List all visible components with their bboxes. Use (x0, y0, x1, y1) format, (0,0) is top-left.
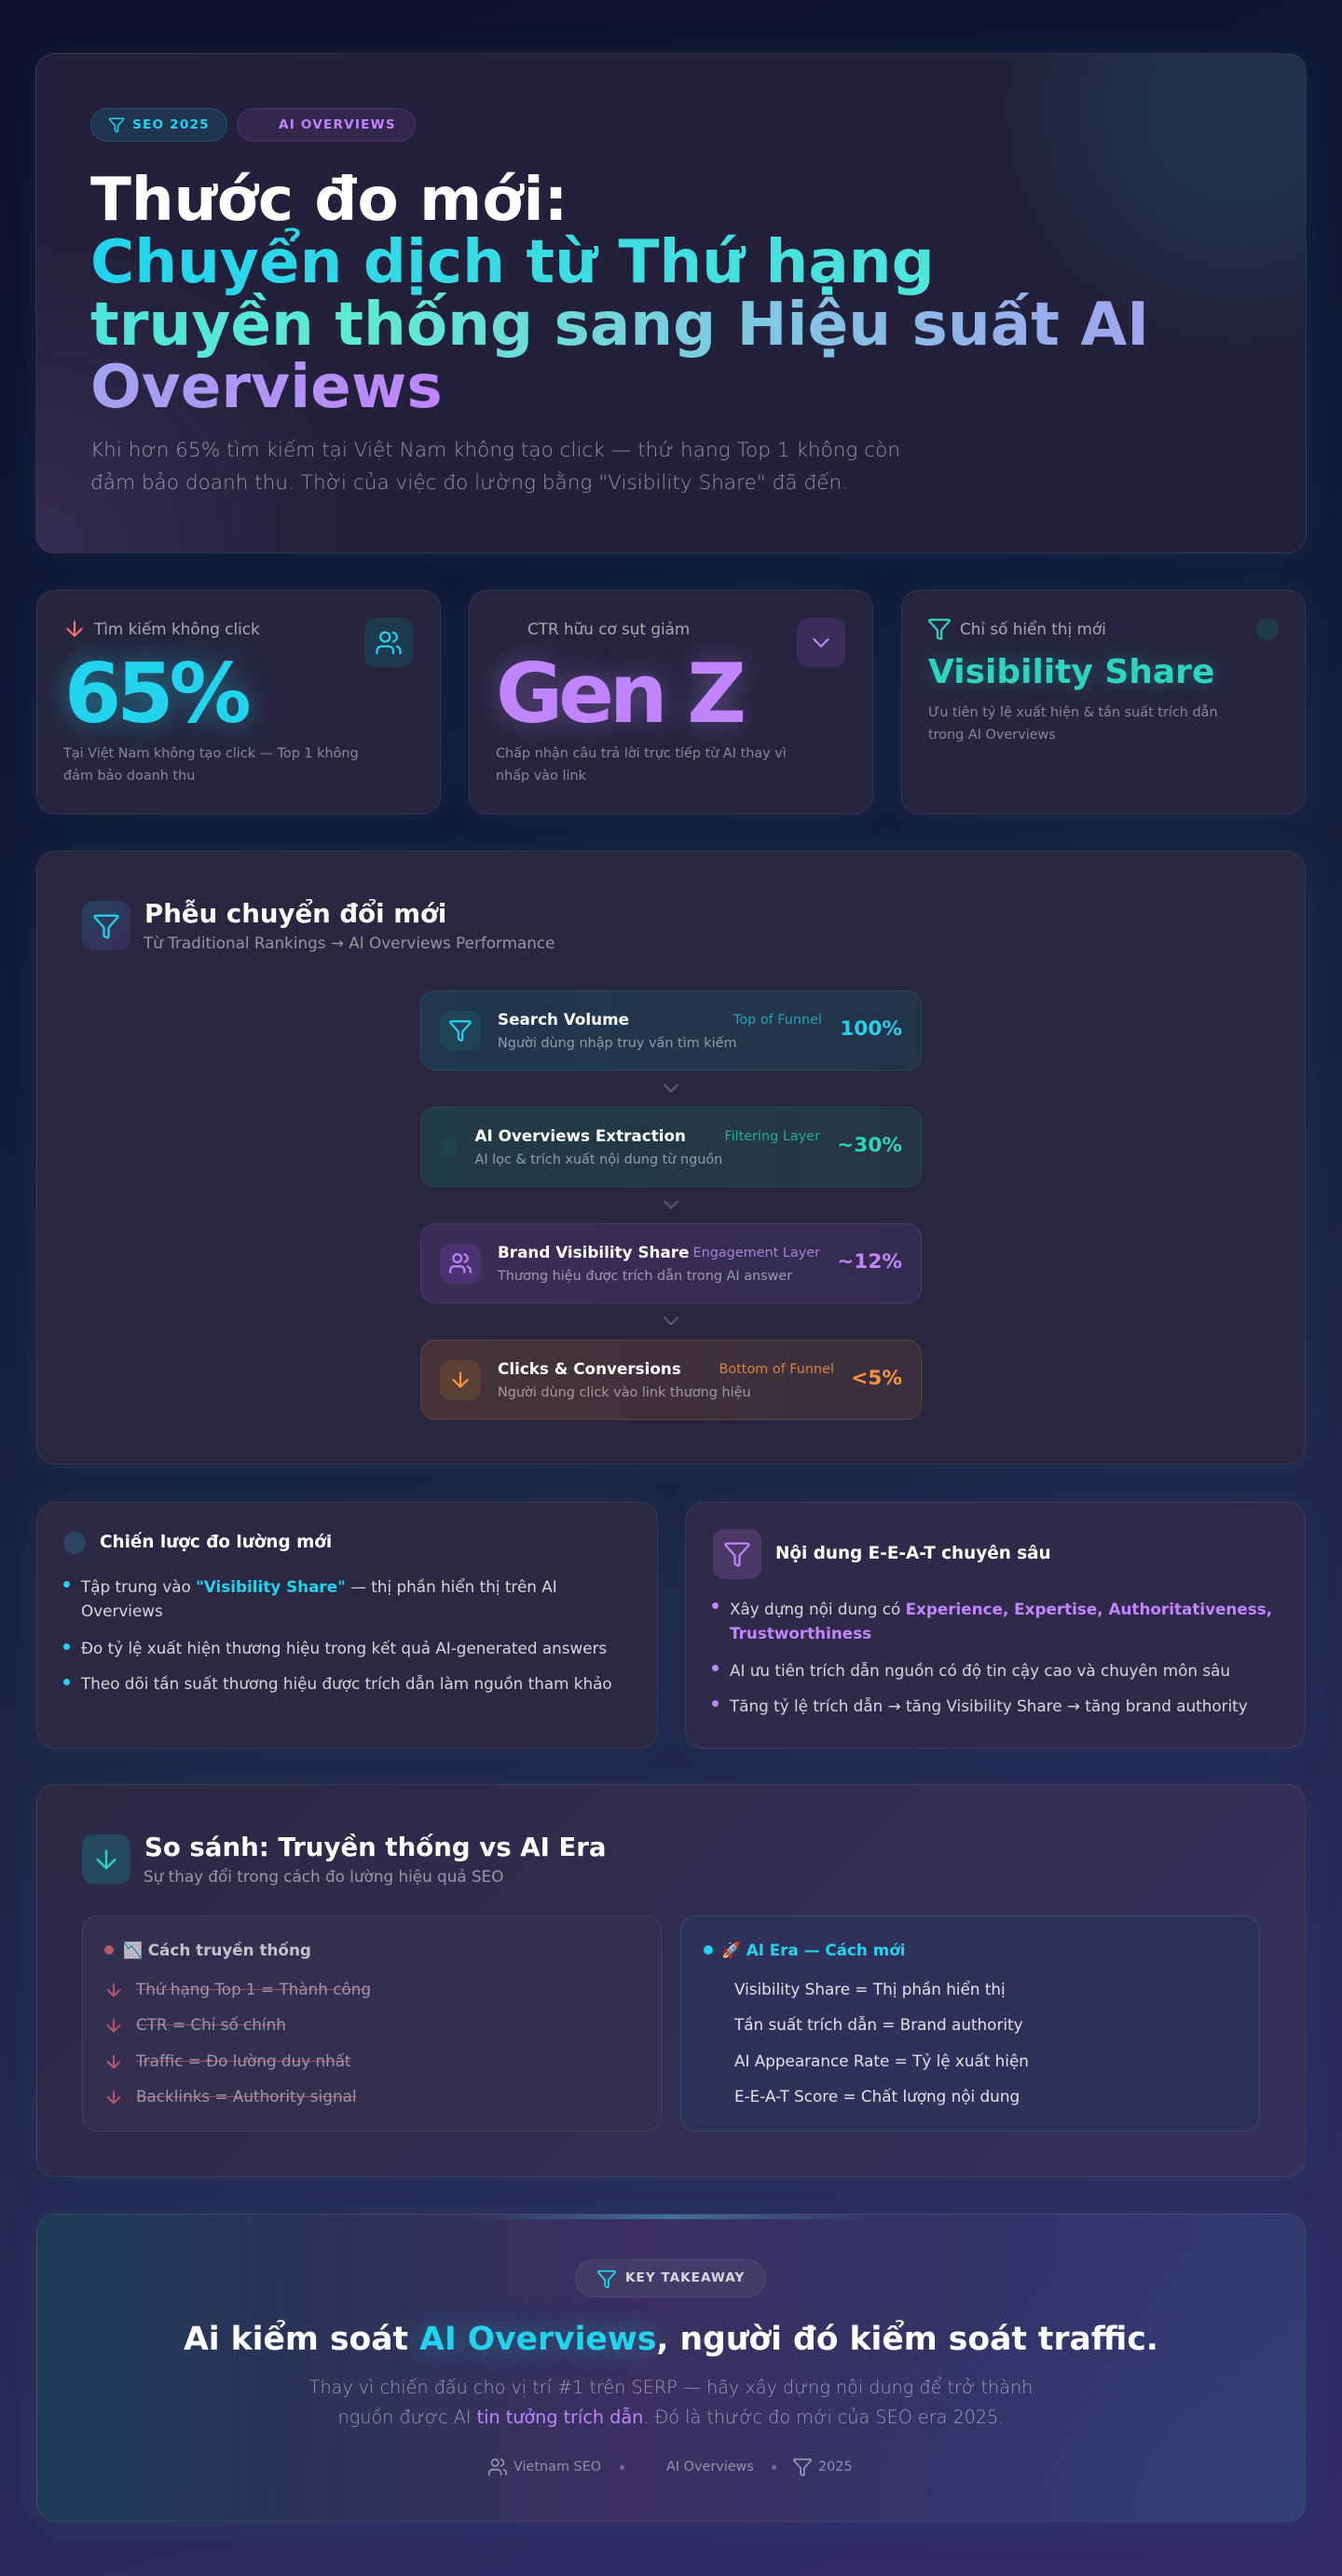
title: truyền thống sang Hiệu suất AI (90, 290, 1149, 360)
bullet text: Tăng tỷ lệ trích dẫn → tăng Visibility Share → tăng brand authority (730, 1697, 1248, 1715)
bullet (712, 1665, 719, 1671)
chevron (664, 1084, 678, 1092)
bullet (63, 1643, 70, 1650)
bullet (712, 1602, 719, 1609)
bullet text: Đo tỷ lệ xuất hiện thương hiệu trong kết quả AI-generated answers (81, 1639, 607, 1657)
funnel step 4: Bottom of Funnel (719, 1362, 834, 1377)
icon box: arrow (82, 1834, 130, 1884)
funnel step 3: Thương hiệu được trích dẫn trong AI answer (498, 1269, 792, 1284)
panel: comparison (36, 1784, 1306, 2177)
value: 65%: 65% (64, 646, 247, 742)
panel: stat card CTR (469, 590, 873, 814)
panel: hero (35, 53, 1307, 553)
description: Tại Việt Nam không tạo click — Top 1 không (63, 746, 359, 761)
bullet text: Theo dõi tần suất thương hiệu được trích dẫn làm nguồn tham khảo (81, 1674, 612, 1693)
label: CTR hữu cơ sụt giảm (527, 619, 690, 637)
funnel step 1: 100% (840, 1017, 902, 1041)
funnel step 3: ~12% (837, 1250, 902, 1274)
tag: SEO 2025 (90, 108, 227, 142)
funnel step 2: Filtering Layer (724, 1129, 820, 1144)
list: AI era (734, 1980, 1029, 2106)
icon placeholder (1256, 618, 1279, 640)
label: Chỉ số hiển thị mới (960, 619, 1106, 637)
funnel step 2: ~30% (837, 1134, 902, 1157)
list: traditional: CTR = Chỉ số chính (136, 2015, 286, 2034)
heading: Phễu chuyển đổi mới (144, 898, 446, 929)
panel: stat card zero-click (36, 590, 441, 814)
panel: AI era (680, 1915, 1260, 2132)
bullet text (730, 1600, 1272, 1642)
bullet text: Tập trung vào "Visibility Share" — thị phần hiển thị trên AI (81, 1577, 557, 1596)
icon box: users (364, 618, 413, 667)
heading: Chiến lược đo lường mới (100, 1533, 332, 1552)
subtitle: đảm bảo doanh thu. Thời của việc đo lường bằng "Visibility Share" đã đến. (90, 471, 848, 495)
header traditional: 📉 Cách truyền thống (123, 1940, 311, 1958)
body: nguồn được AI tin tưởng trích dẫn. Đó là thước đo mới của SEO era 2025. (338, 2406, 1004, 2428)
label: Tìm kiếm không click (94, 619, 260, 637)
heading: So sánh: Truyền thống vs AI Era (144, 1832, 607, 1862)
list: AI era: AI Appearance Rate = Tỷ lệ xuất hiện (734, 2051, 1029, 2070)
list: traditional: Backlinks = Authority signal (136, 2087, 357, 2106)
subheading: Sự thay đổi trong cách đo lường hiệu quả SEO (144, 1867, 503, 1886)
icon box: chevron (797, 618, 845, 667)
bullet text (80, 1577, 557, 1620)
chevron (664, 1317, 678, 1325)
description (496, 745, 787, 784)
bullet text: AI ưu tiên trích dẫn nguồn có độ tin cậy cao và chuyên môn sâu (730, 1661, 1230, 1680)
list: AI era: Visibility Share = Thị phần hiển thị (734, 1980, 1006, 1998)
headline: Ai kiểm soát AI Overviews, người đó kiểm soát traffic. (184, 2321, 1158, 2358)
description (928, 704, 1218, 743)
description: Ưu tiên tỷ lệ xuất hiện & tần suất trích dẫn (928, 705, 1218, 720)
list: AI era: E-E-A-T Score = Chất lượng nội dung (734, 2087, 1020, 2106)
icon placeholder (63, 1532, 86, 1554)
funnel step 3: Brand Visibility Share (498, 1243, 689, 1261)
value: Gen Z: Gen Z (496, 646, 742, 742)
tag: SEO 2025: SEO 2025 (132, 117, 210, 132)
description (63, 746, 359, 784)
chevron (664, 1200, 678, 1209)
panel: stat card visibility (901, 590, 1306, 814)
icon: funnel (928, 619, 951, 640)
funnel step 1: Người dùng nhập truy vấn tìm kiếm (498, 1036, 736, 1051)
funnel step 4: <5% (851, 1367, 902, 1390)
funnel step 2: AI lọc & trích xuất nội dung từ nguồn (475, 1152, 722, 1167)
title (90, 164, 1149, 422)
funnel step 1: Search Volume (498, 1010, 629, 1029)
panel: key takeaway (36, 2214, 1306, 2522)
description: nhấp vào link (496, 769, 586, 784)
list: traditional: Thứ hạng Top 1 = Thành công (136, 1980, 371, 1998)
funnel step 1: Top of Funnel (733, 1013, 822, 1028)
meta row: AI Overviews (666, 2460, 754, 2474)
icon box: funnel (713, 1529, 761, 1579)
pill: key takeaway (575, 2259, 766, 2297)
funnel step 3: Engagement Layer (693, 1246, 820, 1261)
funnel step 3 (420, 1223, 922, 1303)
description: đảm bảo doanh thu (63, 769, 195, 784)
description: Chấp nhận câu trả lời trực tiếp từ AI thay vì (496, 746, 787, 761)
list: traditional (106, 1980, 371, 2106)
title: Overviews (90, 352, 443, 422)
icon box: funnel (82, 901, 130, 950)
dot (104, 1945, 114, 1955)
funnel step 1 (420, 990, 922, 1070)
bullets (63, 1581, 70, 1588)
subtitle (90, 439, 900, 495)
bullet (712, 1700, 719, 1707)
icon: arrow down red (66, 620, 83, 637)
tag: AI Overviews (237, 108, 416, 142)
funnel step 4: Người dùng click vào link thương hiệu (498, 1385, 751, 1400)
meta row (488, 2458, 853, 2476)
list: AI era: Tần suất trích dẫn = Brand authority (734, 2015, 1023, 2034)
funnel step 4 (420, 1340, 922, 1420)
body: Thay vì chiến đấu cho vị trí #1 trên SERP — hãy xây dựng nội dung để trở thành (309, 2376, 1033, 2398)
heading: Nội dung E-E-A-T chuyên sâu (775, 1544, 1051, 1563)
tag: AI Overviews: AI OVERVIEWS (279, 117, 396, 132)
title: Thước đo mới: (90, 164, 568, 235)
list: traditional: Traffic = Đo lường duy nhất (136, 2051, 351, 2070)
subheading: Từ Traditional Rankings → AI Overviews Performance (144, 934, 555, 952)
bullet text: Xây dựng nội dung có Experience, Expertise, Authoritativeness, (730, 1600, 1272, 1618)
panel: traditional (82, 1915, 662, 2132)
bullet (63, 1679, 70, 1685)
header AI era: 🚀 AI Era — Cách mới (721, 1940, 905, 1958)
panel: strategy (36, 1502, 658, 1749)
bullet text: Overviews (81, 1601, 163, 1620)
dot (704, 1945, 713, 1955)
pill: key takeaway: KEY TAKEAWAY (625, 2270, 745, 2285)
bullet text: Trustworthiness (730, 1624, 871, 1642)
panel: funnel (36, 851, 1306, 1465)
funnel step 2: AI Overviews Extraction (475, 1126, 686, 1145)
meta row: Vietnam SEO (514, 2460, 601, 2474)
description: trong AI Overviews (928, 728, 1056, 743)
value: Visibility Share: Visibility Share (928, 653, 1214, 691)
subtitle: Khi hơn 65% tìm kiếm tại Việt Nam không tạo click — thứ hạng Top 1 không còn (90, 439, 900, 462)
funnel step 4: Clicks & Conversions (498, 1359, 681, 1378)
panel: E-E-A-T (684, 1502, 1306, 1749)
funnel step 2 (420, 1107, 922, 1187)
body (309, 2376, 1033, 2428)
meta row: 2025 (818, 2460, 853, 2474)
title: Chuyển dịch từ Thứ hạng (90, 227, 935, 297)
